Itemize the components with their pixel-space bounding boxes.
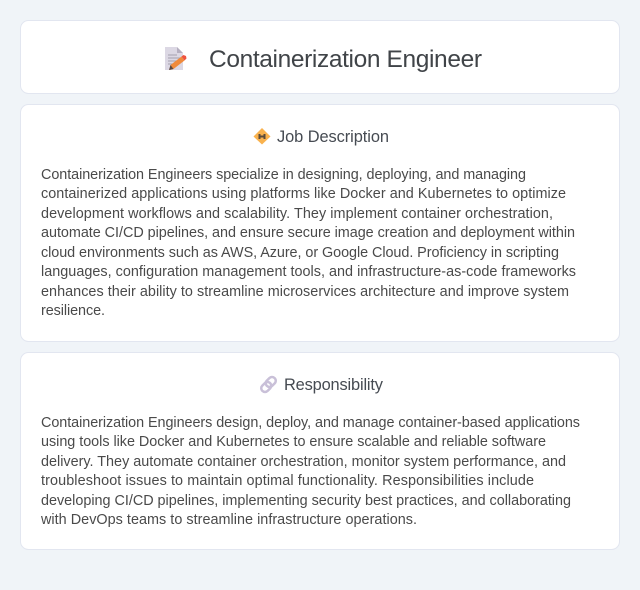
text block: responsibility bbox=[40, 415, 580, 528]
text block: job description: cloud environments such as AWS, Azure, or Google Cloud. Proficiency in scripting bbox=[41, 245, 559, 261]
text block: responsibility: delivery. They automate container orchestration, monitor system performance, and bbox=[41, 454, 566, 470]
heading: job description: Job Description bbox=[277, 128, 389, 146]
icon: document with pencil bbox=[165, 47, 186, 70]
text block: responsibility: using tools like Docker and Kubernetes to ensure scalable and reliable software bbox=[41, 434, 546, 450]
text block: job description: resilience. bbox=[41, 303, 105, 319]
panel: title bbox=[20, 20, 620, 94]
text block: responsibility: Containerization Engineers design, deploy, and manage container-based applications bbox=[41, 415, 580, 431]
panel: job description bbox=[20, 104, 620, 342]
text block: job description: containerized applications using platforms like Docker and Kubernetes to optimize bbox=[41, 186, 566, 202]
text block: job description bbox=[41, 167, 576, 319]
text block: responsibility: developing CI/CD pipelines, implementing security best practices, and collaborating bbox=[41, 493, 571, 509]
text block: responsibility: troubleshoot issues to maintain optimal functionality. Responsibilities include bbox=[41, 473, 534, 489]
text block: job description: enhances their ability to streamline microservices architecture and improve system bbox=[41, 284, 569, 300]
heading: title: Containerization Engineer bbox=[209, 46, 482, 73]
text block: job description: automate CI/CD pipelines, and ensure secure image creation and deployment within bbox=[41, 225, 575, 241]
text block: job description: languages, configuration management tools, and infrastructure-as-code frameworks bbox=[41, 264, 576, 280]
text block: job description: development workflows and scalability. They implement container orchestration, bbox=[41, 206, 553, 222]
text block: responsibility: with DevOps teams to streamline infrastructure operations. bbox=[40, 512, 417, 528]
icon: chain link bbox=[260, 375, 277, 394]
text block: job description: Containerization Engineers specialize in designing, deploying, and managing bbox=[41, 167, 526, 183]
panel: responsibility bbox=[20, 352, 620, 550]
heading: responsibility: Responsibility bbox=[284, 376, 384, 394]
icon: diamond sign bbox=[254, 128, 270, 144]
